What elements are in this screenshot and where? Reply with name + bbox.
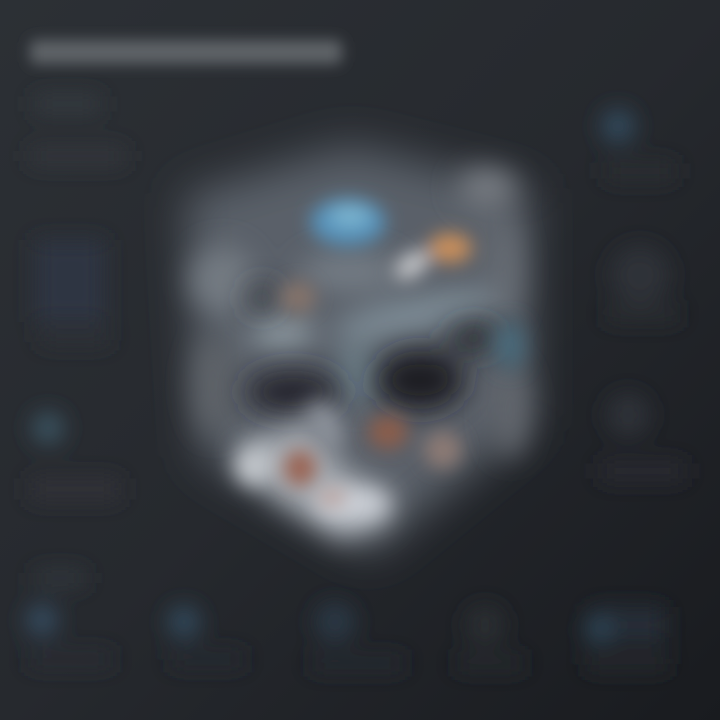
central isometric cube illustration [185,145,530,555]
cube body [185,145,530,555]
title [30,40,342,64]
right item 3 [600,393,685,480]
panel: right column items [600,109,685,480]
bottom item 4 [585,607,670,670]
panel: bottom row items [168,602,670,670]
left item 2 [35,240,110,344]
bottom item 1 [168,606,245,666]
teal side panel [494,321,526,369]
bottom item 2 [310,602,405,670]
cube light areas [190,168,528,458]
left item 4 [26,570,113,666]
white highlights [234,395,388,518]
left item 3 [30,412,120,500]
small orange accents [280,281,462,506]
cube dark recesses [245,284,500,414]
orange and white tile [389,233,472,286]
blue tile [310,198,386,246]
bottom item 3 [455,605,525,670]
left item 1 [30,95,125,164]
right item 2 [605,245,680,321]
bottom white tile [240,420,395,540]
panel: left column items [26,95,125,666]
right item 1 [601,109,675,180]
